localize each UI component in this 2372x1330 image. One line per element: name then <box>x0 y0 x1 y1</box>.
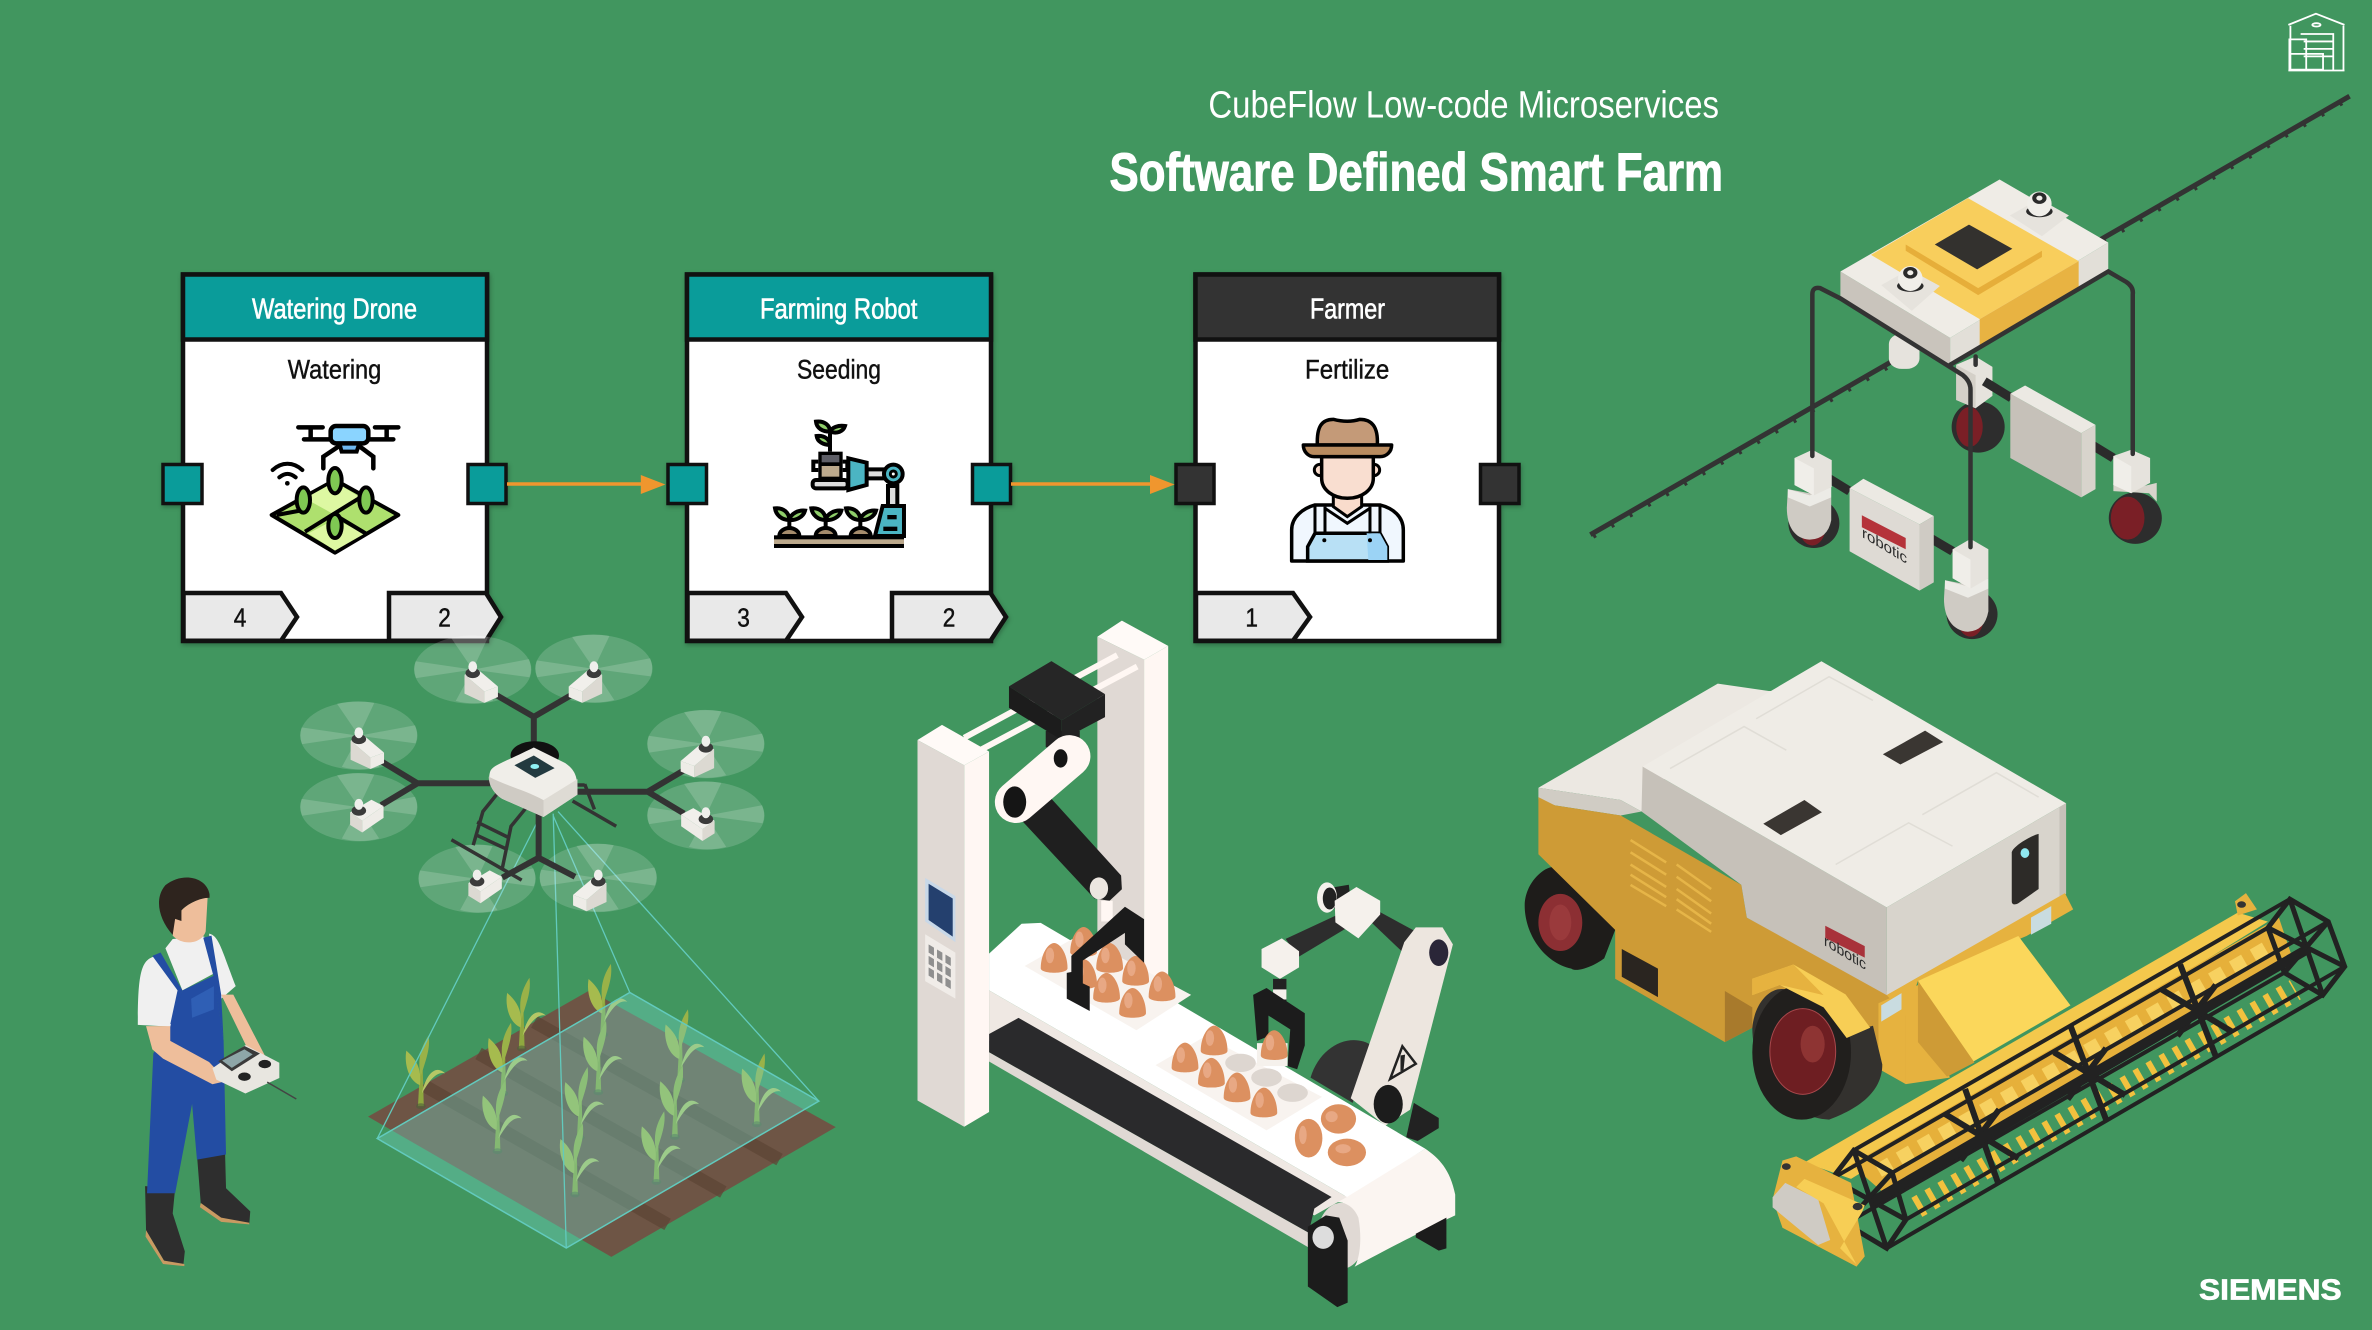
left wheel and leg <box>1787 450 1850 548</box>
output count tab: 2 <box>943 603 955 633</box>
right port <box>1480 464 1519 504</box>
illustration: field robot <box>1590 96 2350 639</box>
input count tab: 4 <box>234 603 246 633</box>
plants <box>406 964 781 1197</box>
cutter teeth <box>1917 990 2295 1207</box>
label: robotic on robot panel: robotic <box>1862 524 1907 568</box>
title block <box>1110 84 1723 203</box>
header side plate <box>1773 893 2257 1267</box>
overalls <box>147 976 226 1193</box>
illustration: field plot with plants <box>368 812 836 1257</box>
output count tab <box>892 593 1006 641</box>
landing gear <box>451 784 616 880</box>
boom mount <box>1889 334 1919 369</box>
robot body <box>1840 179 2108 365</box>
card frame <box>183 274 487 641</box>
soil <box>368 990 836 1257</box>
rear robot base <box>1406 1103 1439 1141</box>
motors <box>350 661 715 911</box>
illustration: egg sorting conveyor <box>918 621 1455 1307</box>
task label: Fertilize <box>1305 354 1389 384</box>
input count tab: 3 <box>737 603 750 633</box>
loose eggs <box>1295 1104 1366 1166</box>
hatch <box>1622 949 1658 997</box>
overall straps <box>152 936 224 1041</box>
scan plane <box>377 992 819 1248</box>
cab roof <box>1643 661 2066 907</box>
output count tab: 2 <box>438 603 451 633</box>
left port <box>1176 464 1214 504</box>
sensor pods <box>1881 191 2069 311</box>
icon: drone over field <box>272 426 398 553</box>
card header <box>1196 274 1499 340</box>
label: robotic on harvester: robotic <box>1824 932 1866 974</box>
remote controller <box>212 1045 296 1099</box>
cab front <box>1887 803 2066 995</box>
input count tab <box>1196 593 1310 641</box>
header label: Watering Drone <box>252 293 417 325</box>
right side panel <box>1984 381 2113 497</box>
engine vents <box>1631 840 1711 932</box>
left side panel <box>1850 479 1953 591</box>
right port <box>972 464 1010 504</box>
drone body <box>489 741 577 817</box>
cab side <box>1642 767 1887 995</box>
left port <box>668 464 706 504</box>
panel: farmer service <box>1176 274 1519 641</box>
egg tray 2 <box>1156 1026 1322 1130</box>
illustration: operator with remote <box>138 878 296 1266</box>
header label: Farming Robot <box>760 293 917 325</box>
headlights <box>2031 906 2051 935</box>
illustration: watering drone <box>300 634 765 913</box>
yellow chassis <box>1538 797 1917 1084</box>
chute <box>1887 893 2073 1016</box>
input count tab <box>688 593 802 641</box>
card header <box>687 274 991 340</box>
right port <box>468 464 506 504</box>
card frame <box>1196 274 1499 641</box>
arms <box>377 692 689 878</box>
icon: farmer portrait <box>1292 419 1403 561</box>
conveyor belt <box>989 923 1455 1307</box>
pick arm <box>1003 749 1122 921</box>
fender <box>1752 965 1870 1038</box>
frame <box>1812 271 2133 547</box>
arrow: drone to robot <box>507 475 665 494</box>
illustration: combine harvester <box>1525 661 2345 1267</box>
left gripper <box>1067 907 1144 1011</box>
panel: watering drone service <box>163 274 506 641</box>
right wheel and leg <box>2109 450 2162 544</box>
output count tab <box>389 593 501 641</box>
icon: warehouse <box>2288 14 2344 70</box>
arrow: robot to farmer <box>1011 475 1175 494</box>
logo band <box>1825 926 1865 958</box>
rear hood <box>1538 684 1807 811</box>
header label: Farmer <box>1310 293 1385 325</box>
icon: seeding robot <box>774 422 904 548</box>
card frame <box>687 274 991 641</box>
front wheel <box>1752 985 1882 1120</box>
header deck <box>1804 913 2268 1179</box>
rear black carriage <box>1009 661 1105 761</box>
right robot arm <box>1262 882 1453 1126</box>
spray boom <box>1590 96 2350 537</box>
shirt <box>138 934 236 1027</box>
rotors <box>300 634 765 913</box>
front wheel and leg <box>1944 539 1998 639</box>
egg tray 1 <box>1025 927 1191 1030</box>
logo: Siemens: SIEMENS <box>2199 1274 2342 1306</box>
left port <box>163 464 202 504</box>
panel: farming robot service <box>668 274 1010 641</box>
subtitle: CubeFlow Low-code Microservices <box>1208 84 1719 126</box>
rear wheel and leg <box>1952 356 2005 453</box>
input count tab: 1 <box>1245 603 1258 633</box>
task label: Watering <box>288 354 381 384</box>
arms <box>146 995 268 1084</box>
boots <box>145 1152 250 1266</box>
task label: Seeding <box>797 354 881 384</box>
card header <box>183 274 487 340</box>
head <box>159 878 210 942</box>
reel <box>1832 899 2345 1248</box>
input count tab <box>184 593 297 641</box>
main title: Software Defined Smart Farm <box>1110 143 1723 203</box>
rear column <box>1097 621 1168 981</box>
front column with control panel <box>918 725 989 1127</box>
cab window <box>2012 834 2039 904</box>
right gripper <box>1253 979 1305 1069</box>
rails <box>964 655 1137 752</box>
scan cone lines <box>377 812 819 1248</box>
rear wheel <box>1525 867 1615 970</box>
